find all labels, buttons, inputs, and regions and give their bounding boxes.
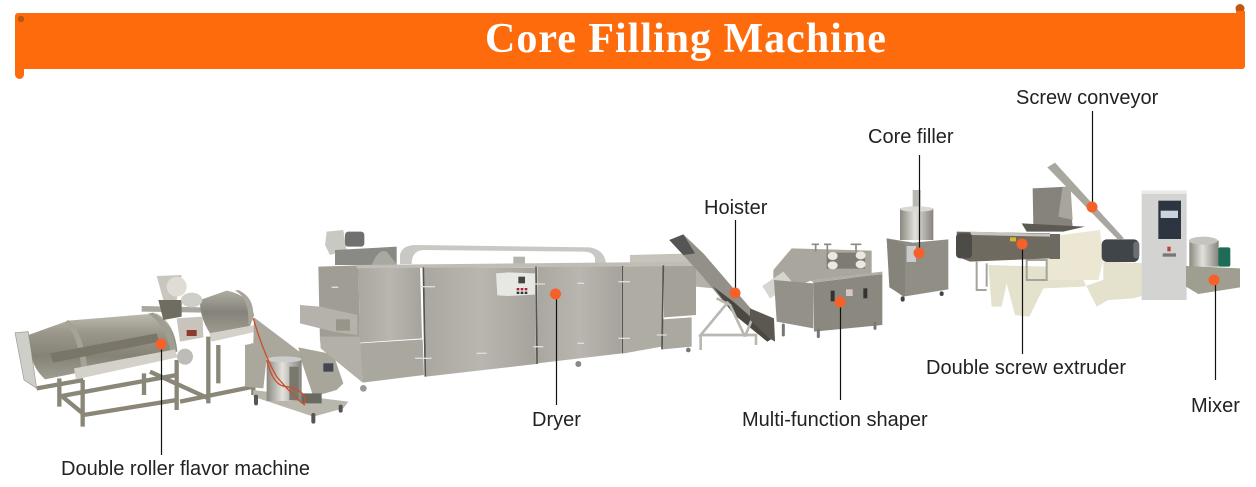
callout: multi-function shaper: Multi-function shaper — [742, 409, 928, 431]
callout: screw conveyor: Screw conveyor — [1016, 87, 1159, 109]
title banner — [15, 4, 1245, 79]
title: Core Filling Machine — [485, 16, 887, 62]
callout: mixer: Mixer — [1191, 395, 1240, 417]
callout: screw conveyor — [1016, 87, 1159, 212]
callout: core filler — [868, 126, 954, 258]
callout: double screw extruder: Double screw extruder — [926, 357, 1126, 379]
callout: mixer — [1191, 274, 1240, 417]
machine: multi-function shaper — [750, 244, 882, 342]
callout: hoister — [704, 197, 768, 298]
callout: double roller flavor machine: Double roller flavor machine — [61, 458, 310, 480]
callout: double screw extruder — [926, 238, 1126, 379]
callout: core filler: Core filler — [868, 126, 954, 148]
machine: double roller flavor machine — [15, 275, 348, 427]
callout: double roller flavor machine — [61, 338, 310, 480]
machine: double screw extruder — [956, 163, 1151, 317]
callout: dryer: Dryer — [532, 409, 581, 431]
callout: hoister: Hoister — [704, 197, 768, 219]
machine: dryer — [300, 230, 730, 392]
callout: multi-function shaper — [742, 296, 928, 431]
machine: mixer — [1186, 237, 1240, 294]
machine: control cabinet — [1142, 191, 1187, 300]
callout: dryer — [532, 288, 581, 431]
machine: core filler — [887, 190, 948, 300]
machine: hoister — [669, 234, 775, 350]
